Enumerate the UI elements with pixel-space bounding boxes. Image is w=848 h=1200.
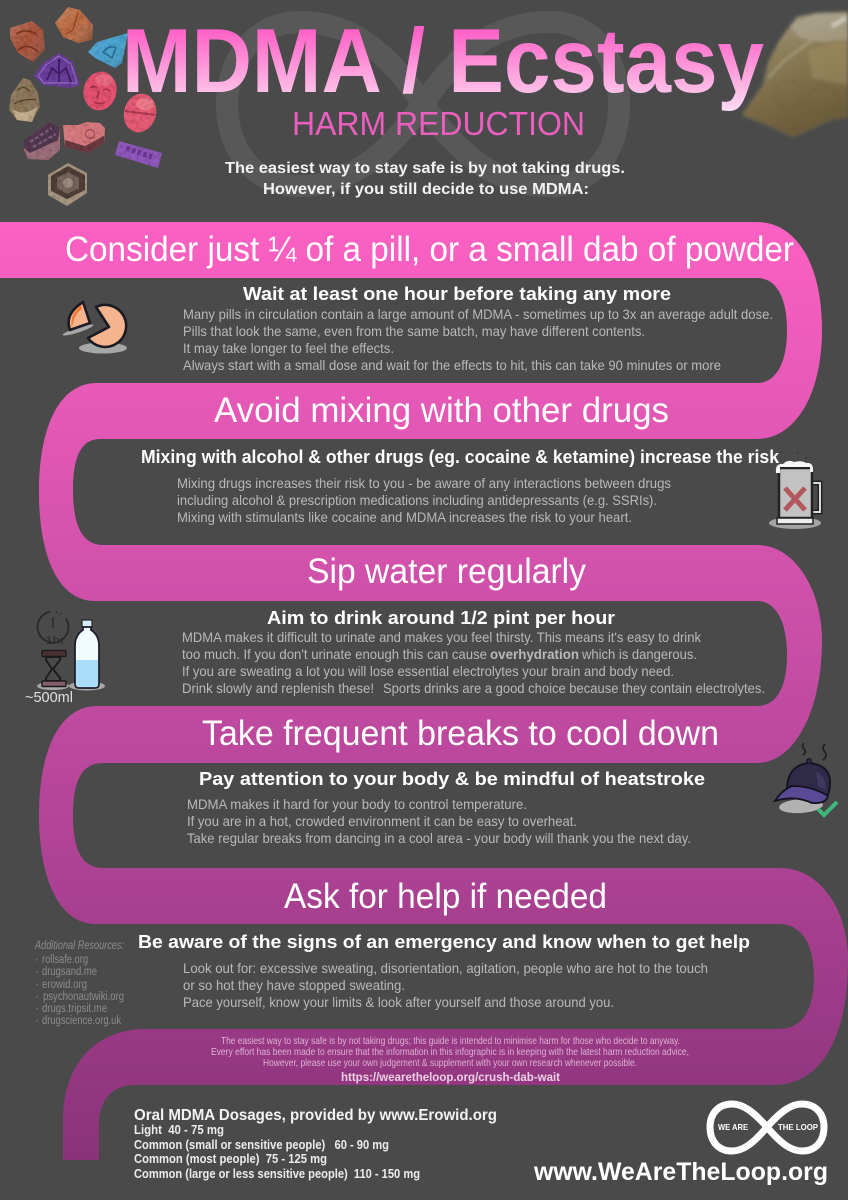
section 4: cooling [187, 713, 837, 846]
pill: brown hexagon [48, 163, 87, 206]
additional resources list: · [35, 979, 39, 991]
additional resources list: · [35, 991, 39, 1003]
subheading: Pay attention to your body & be mindful of heatstroke [199, 769, 705, 789]
body text: Pills that look the same, even from the same batch, may have different contents. [183, 323, 645, 339]
additional resources list: · [35, 1015, 39, 1027]
section 3: water [25, 551, 765, 706]
MDMA powder crystal [742, 12, 848, 137]
body text: Mixing drugs increases their risk to you - be aware of any interactions between drugs [177, 475, 671, 491]
body text: too much. If you don't urinate enough this can cause [182, 646, 487, 662]
body text: Drink slowly and replenish these! [182, 680, 374, 696]
pill: violet bar [115, 141, 162, 168]
pill: brown-red [10, 21, 45, 62]
additional resources list: · [35, 966, 39, 978]
disclaimer: However, please use your own judgement & supplement with your own research whenever possible. [263, 1057, 637, 1069]
additional resources list: psychonautwiki.org [43, 991, 124, 1003]
body text: If you are in a hot, crowded environment it can be easy to overheat. [187, 813, 577, 829]
pill: pink skull [80, 68, 120, 114]
additional resources list [34, 940, 124, 1027]
additional resources list: · [35, 954, 39, 966]
body text: MDMA makes it difficult to urinate and makes you feel thirsty. This means it's easy to drink [182, 629, 702, 645]
pills photo cluster [9, 7, 162, 206]
body text: Mixing with stimulants like cocaine and MDMA increases the risk to your heart. [177, 509, 632, 525]
pill: pink scored [119, 90, 161, 136]
body text [177, 475, 671, 525]
heading: Ask for help if needed [284, 876, 607, 916]
body text: which is dangerous. [581, 646, 697, 662]
pill: blue shield [88, 33, 128, 68]
body text: overhydration [490, 646, 579, 662]
pill: dark purple [24, 122, 60, 160]
additional resources list: drugs.tripsit.me [42, 1003, 107, 1015]
body text: Many pills in circulation contain a large amount of MDMA - sometimes up to 3x an average adult dose. [183, 306, 773, 322]
icon: clock: 1hr [45, 635, 65, 647]
additional resources list: erowid.org [42, 979, 87, 991]
body text: including alcohol & prescription medications including antidepressants (e.g. SSRIs). [177, 492, 657, 508]
pill: purple shield [34, 53, 80, 88]
body text [183, 960, 708, 1010]
section 5: help [138, 876, 750, 1010]
additional resources list: drugsand.me [42, 966, 97, 978]
dosage table: Common (small or sensitive people) 60 - 90 mg [134, 1138, 389, 1152]
body text [183, 306, 773, 373]
subheading: Be aware of the signs of an emergency and know when to get help [138, 932, 750, 952]
watermark infinity logo [227, 22, 619, 186]
body text: It may take longer to feel the effects. [183, 340, 394, 356]
disclaimer: https://wearetheloop.org/crush-dab-wait [341, 1070, 560, 1084]
additional resources list: Additional Resources: [34, 940, 124, 952]
body text [182, 629, 765, 696]
icon: hourglass [37, 650, 69, 690]
heading: Consider just ¼ of a pill, or a small dab of powder [65, 229, 794, 269]
dosage table: Oral MDMA Dosages, provided by www.Erowid.org [134, 1107, 497, 1124]
dosage table: Common (most people) 75 - 125 mg [134, 1152, 327, 1166]
dosage table: Light 40 - 75 mg [134, 1123, 224, 1137]
icon: beer mug with cross [769, 452, 821, 529]
disclaimer [211, 1035, 689, 1084]
heading: Take frequent breaks to cool down [202, 713, 719, 753]
intro text: The easiest way to stay safe is by not taking drugs. [225, 160, 625, 177]
logo: We Are The Loop [710, 1104, 824, 1151]
title: MDMA / Ecstasy [122, 11, 764, 112]
logo: We Are The Loop: THE LOOP [778, 1122, 818, 1132]
body text: Pace yourself, know your limits & look after yourself and those around you. [183, 994, 614, 1010]
body text: or so hot they have stopped sweating. [183, 977, 405, 993]
website url: www.WeAreTheLoop.org [533, 1158, 828, 1186]
icon: pie chart with slice removed [62, 302, 127, 354]
body text: Sports drinks are a good choice because they contain electrolytes. [383, 680, 765, 696]
section 2: mixing [141, 390, 821, 529]
disclaimer: The easiest way to stay safe is by not taking drugs; this guide is intended to minimise harm for those who decide to anyway. [221, 1035, 680, 1047]
pill: tan [9, 78, 40, 122]
subtitle: HARM REDUCTION [292, 105, 585, 142]
heading: Sip water regularly [307, 551, 586, 591]
dosage table [134, 1107, 497, 1181]
body text: MDMA makes it hard for your body to control temperature. [187, 796, 527, 812]
intro text: However, if you still decide to use MDMA: [263, 181, 589, 198]
body text: Always start with a small dose and wait for the effects to hit, this can take 90 minutes or more [183, 357, 721, 373]
section 1: dose [62, 229, 794, 373]
body text: Look out for: excessive sweating, disorientation, agitation, people who are hot to the touch [183, 960, 708, 976]
body text: If you are sweating a lot you will lose essential electrolytes your brain and body need. [182, 663, 674, 679]
pill: orange-brown [55, 7, 93, 43]
intro text [225, 160, 625, 198]
subheading: Mixing with alcohol & other drugs (eg. cocaine & ketamine) increase the risk [141, 447, 780, 467]
pill: pink-red bat [63, 122, 105, 153]
additional resources list: · [35, 1003, 39, 1015]
label: 500ml: ~500ml [25, 689, 73, 706]
winding ribbon [0, 222, 848, 1160]
icon: water bottle [69, 620, 105, 690]
body text [187, 796, 691, 846]
dosage table: Common (large or less sensitive people) 110 - 150 mg [134, 1167, 420, 1181]
logo: We Are The Loop: WE ARE [718, 1122, 748, 1132]
additional resources list: drugscience.org.uk [42, 1015, 121, 1027]
icon: clock [38, 612, 68, 647]
additional resources list: rollsafe.org [42, 954, 88, 966]
heading: Avoid mixing with other drugs [214, 390, 669, 430]
body text: Take regular breaks from dancing in a cool area - your body will thank you the next day. [187, 830, 691, 846]
subheading: Wait at least one hour before taking any more [243, 284, 671, 304]
icon: cap with heat and check mark [775, 743, 837, 815]
disclaimer: Every effort has been made to ensure that the information in this infographic is in keeping with the latest harm reduction advice, [211, 1046, 689, 1058]
subheading: Aim to drink around 1/2 pint per hour [267, 608, 615, 628]
